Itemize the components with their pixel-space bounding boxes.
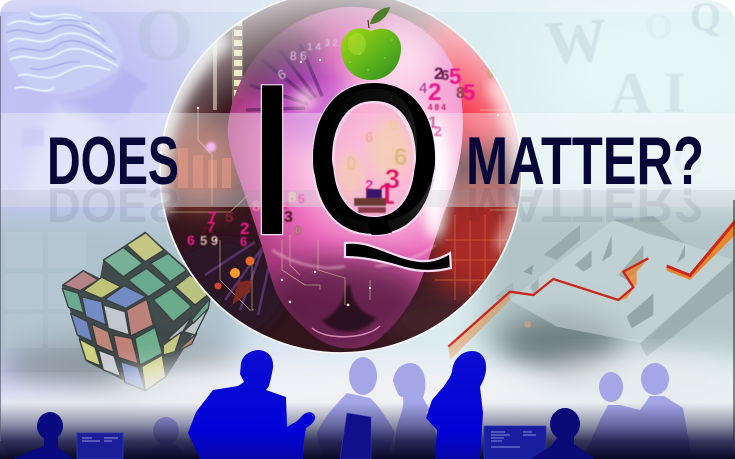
apple <box>341 7 401 80</box>
numerals: between I and Q: 2 <box>284 201 289 211</box>
circuit traces <box>170 97 517 310</box>
decorative letters, top: W <box>543 6 609 78</box>
numerals: upper right cluster: 5 <box>463 80 475 105</box>
numerals: between I and Q: 5 <box>298 192 305 206</box>
silhouette: seated rear figure <box>150 417 186 459</box>
inner Q numerals: 3 <box>385 164 400 194</box>
letter I: I <box>242 38 302 280</box>
letter Q bowl backing <box>313 83 435 235</box>
red staircase path <box>448 218 735 360</box>
decorative letters, top: A I <box>610 60 686 125</box>
circuit nodes <box>197 59 499 306</box>
edge fade <box>160 0 522 258</box>
numerals: upper head stream <box>278 39 338 80</box>
numerals: left cluster: 5 <box>225 209 233 226</box>
panel: brain and profile head, top left <box>4 6 147 200</box>
burst streaks, lower left <box>205 240 272 315</box>
maze with red path, lower right <box>448 216 735 360</box>
heading: DOES: DOES <box>47 123 179 199</box>
laptop right <box>484 426 546 459</box>
silhouette: woman with laptop <box>317 357 395 459</box>
numerals: upper right cluster: 1 <box>428 113 437 132</box>
inner Q numerals: 6 <box>394 144 407 171</box>
inner Q numerals <box>334 103 414 217</box>
numerals: left cluster: 7 <box>207 219 215 236</box>
inner Q numerals: 8 <box>390 117 398 133</box>
numerals: upper right cluster: 2 <box>434 64 443 83</box>
numerals: between I and Q: 8 <box>288 189 296 206</box>
numerals: left cluster: 8 <box>252 198 260 215</box>
numerals: left cluster: 5 9 <box>200 233 218 248</box>
numerals: upper right cluster: 2 <box>428 79 441 106</box>
light background silhouettes <box>150 357 692 459</box>
numerals: upper head stream: 3 2 <box>325 38 338 48</box>
numerals: between I and Q <box>284 189 305 237</box>
letter Q tail <box>345 243 451 271</box>
film strip <box>213 21 243 110</box>
face features <box>272 245 435 337</box>
grid rays, right <box>435 215 510 300</box>
inner Q numerals: 0 <box>346 154 357 175</box>
head <box>224 7 463 348</box>
silhouette: thinking man <box>426 351 486 459</box>
silhouette: seated man right <box>530 408 595 459</box>
glowing orbs <box>206 142 254 305</box>
letter Q: Q <box>304 27 444 264</box>
heading: DOES <box>50 136 178 222</box>
panel: central circle with head <box>161 0 522 352</box>
reflection of DOES: DOES <box>47 177 179 233</box>
inner Q numerals: 6 <box>365 129 373 146</box>
numerals: upper right cluster: 8 <box>456 85 465 102</box>
heading: MATTER? <box>469 136 702 222</box>
title band <box>0 113 735 207</box>
numerals: upper head stream: 1 4 <box>307 42 321 53</box>
numerals: upper right cluster: 6 <box>441 67 449 84</box>
silhouette: woman in profile <box>393 363 440 459</box>
numerals: upper right cluster: 4 <box>419 80 427 97</box>
numerals: left cluster: 6 <box>187 232 195 248</box>
numerals: upper head stream: 6 <box>275 66 289 83</box>
heading: IQ <box>260 82 452 272</box>
foreground silhouettes <box>13 350 595 459</box>
decorative letters, top <box>139 3 720 112</box>
numerals: left cluster: 7 <box>208 209 216 226</box>
numerals: upper right cluster: 5 <box>449 64 461 89</box>
numerals: between I and Q: 3 <box>284 209 293 226</box>
silhouette: standing presenter <box>188 350 315 459</box>
numerals: between I and Q: 0 <box>295 225 301 237</box>
silhouette: seated man left <box>13 412 73 459</box>
bar chart motif, left <box>178 148 231 188</box>
numerals: upper right cluster <box>419 64 494 139</box>
numerals: left cluster: 2 <box>240 219 249 238</box>
numerals: upper right cluster: 0 <box>487 67 494 81</box>
silhouette: right pair <box>583 363 692 459</box>
numerals: left cluster: 2 <box>201 225 207 237</box>
inner Q numerals: 2 <box>365 177 373 194</box>
decorative letters, top: O <box>645 6 673 46</box>
scattered pink numerals <box>187 38 494 249</box>
decorative letters, top: G <box>672 139 705 185</box>
tile pattern, lower left <box>5 232 86 348</box>
inner Q numerals: 1 <box>378 178 395 211</box>
laptop left <box>77 433 123 459</box>
numerals: left cluster <box>187 198 260 249</box>
numerals: left cluster: 6 <box>240 234 247 249</box>
circle outline <box>160 0 522 353</box>
numerals: upper head stream: 8 6 <box>290 49 307 63</box>
numerals: upper right cluster: 2 <box>434 123 442 139</box>
bottom dark gradient <box>0 395 735 459</box>
numerals: upper right cluster: 4 8 4 <box>428 103 446 112</box>
Rubik's cube <box>62 232 213 392</box>
faint pale fog under the illustrations <box>0 357 735 432</box>
laptop held by woman <box>340 413 371 459</box>
circle background <box>161 0 522 352</box>
